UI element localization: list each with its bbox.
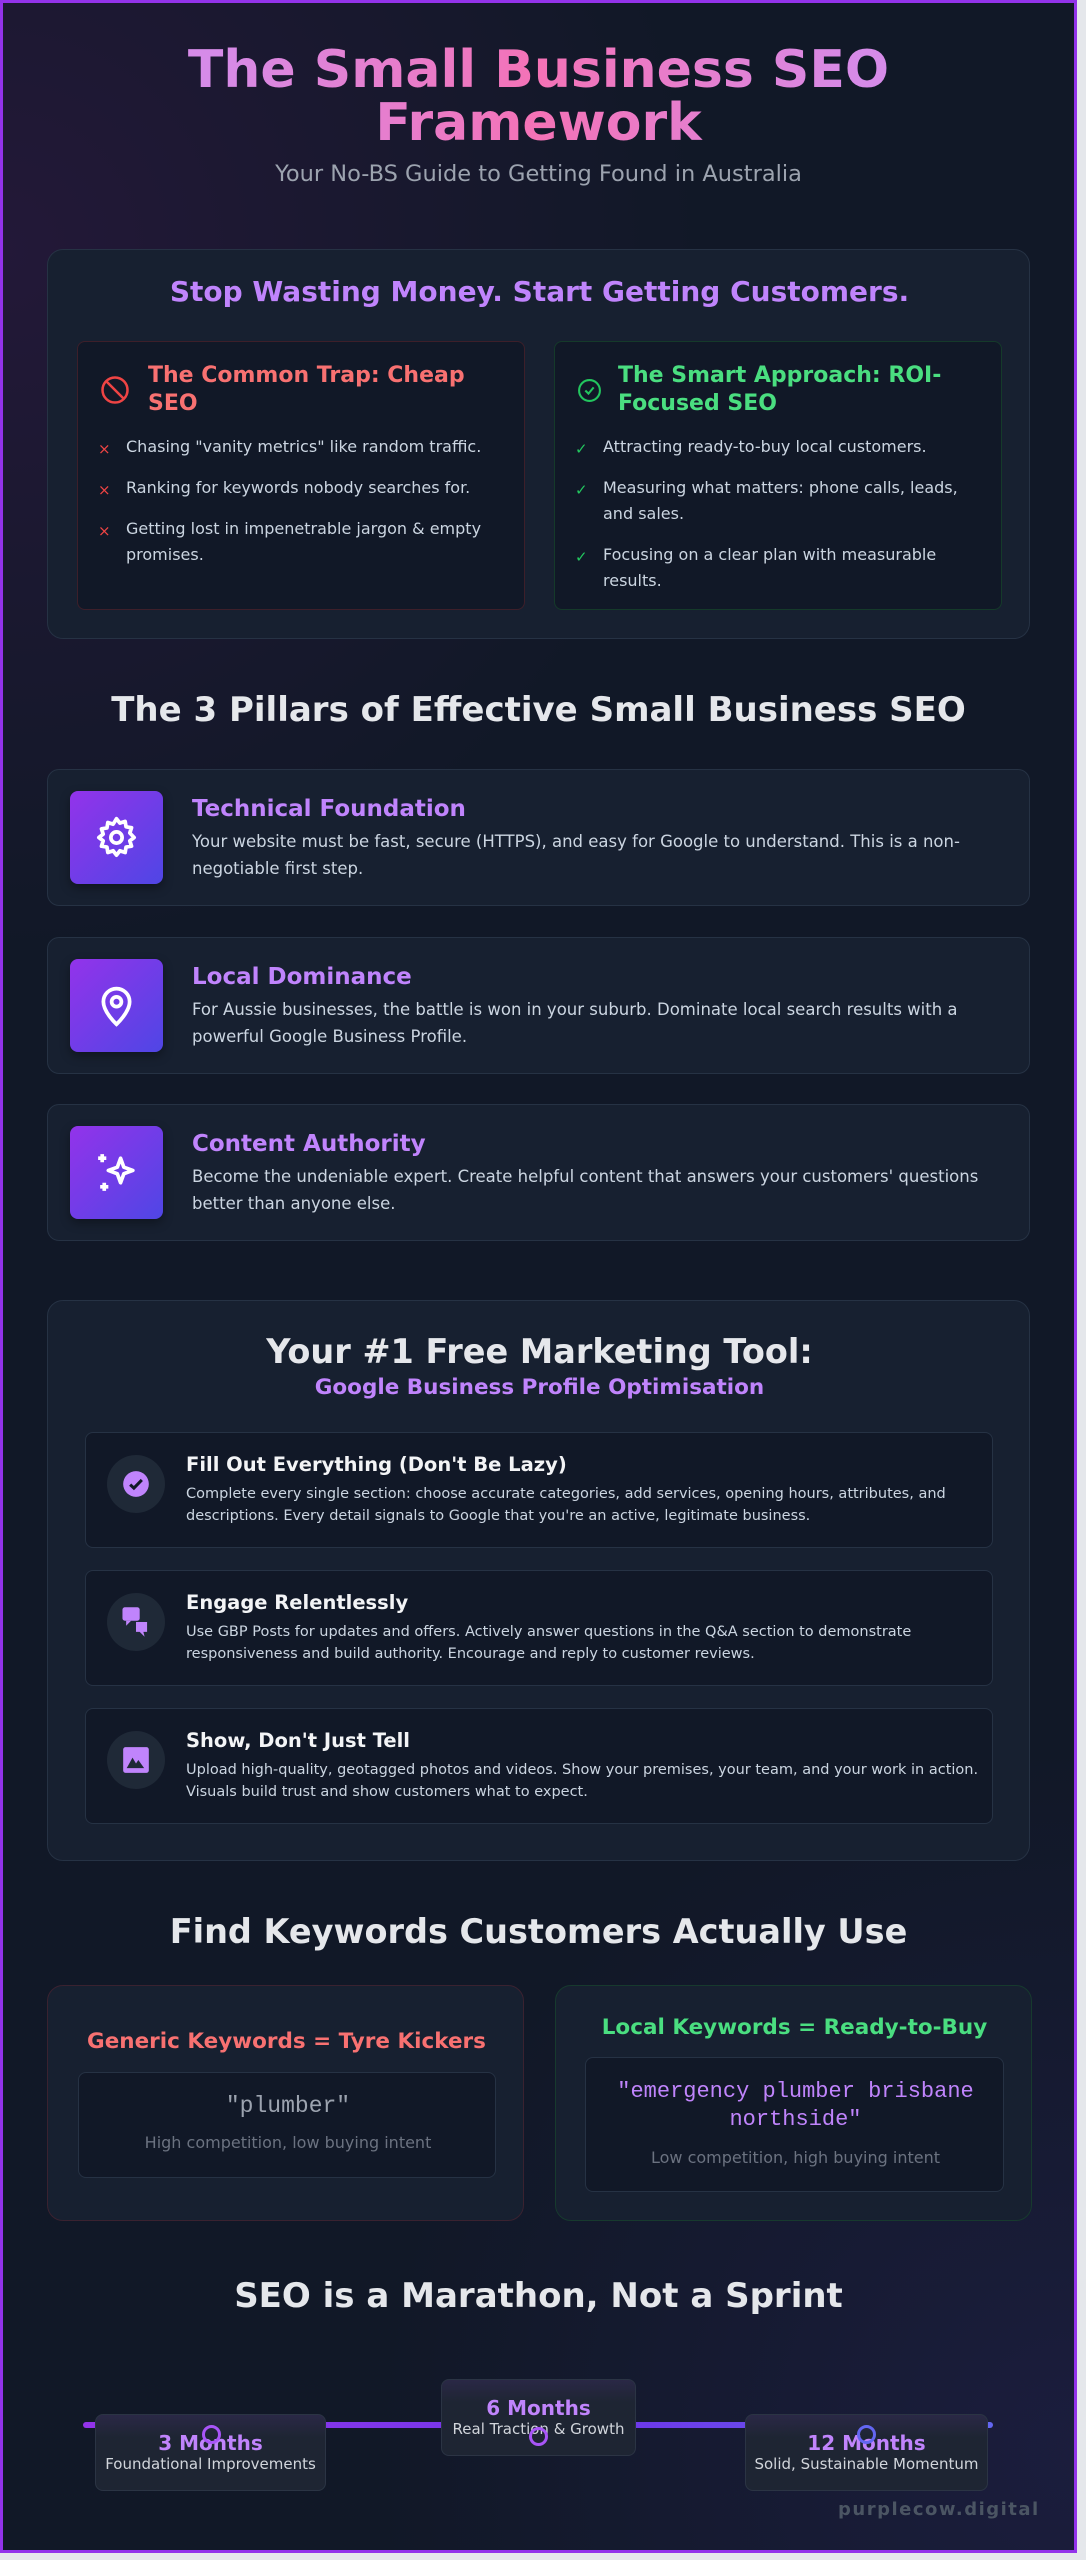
panel: comparison [47,249,1030,639]
title: Framework [375,93,702,153]
list: × [98,522,111,540]
footer brand: purplecow.digital [838,2499,1040,2520]
list: Getting lost in impenetrable jargon & empty promises. [126,519,481,564]
list: Ranking for keywords nobody searches for. [126,478,470,497]
list [575,437,958,590]
item: engage: Use GBP Posts for updates and offers. Actively answer questions in the Q&A section to demonstrate responsiveness and build authority. Encourage and reply to customer reviews. [186,1624,911,1662]
item: fill out: Fill Out Everything (Don't Be Lazy) [186,1453,567,1476]
keyword box: "emergency plumber brisbane northside" [617,2079,974,2132]
item: show [85,1708,993,1824]
item: engage: Engage Relentlessly [186,1591,408,1614]
icon: map pin [70,959,163,1052]
keyword box [78,2072,496,2178]
list: Measuring what matters: phone calls, leads, and sales. [603,478,958,523]
card heading: The Smart Approach: ROI-Focused SEO [618,363,941,416]
title: The Small Business SEO [188,40,889,100]
markers [202,2425,221,2444]
item: fill out: Complete every single section: choose accurate categories, add services, opening hours, attributes, and descriptions. Every detail signals to Google that you're an active, legitimate business. [186,1486,946,1524]
panel: generic keywords: Generic Keywords = Tyre Kickers [87,2029,486,2054]
list: Chasing "vanity metrics" like random traffic. [126,437,481,456]
list: ✓ [575,440,588,458]
pillar: content [47,1104,1030,1241]
pillar: local: For Aussie businesses, the battle is won in your suburb. Dominate local search results with a powerful Google Business Profile. [192,1000,958,1046]
milestone: 3 months: Foundational Improvements [105,2455,316,2473]
list: × [98,481,111,499]
pillar: content: Become the undeniable expert. Create helpful content that answers your customers' questions better than anyone else. [192,1167,978,1213]
icon: chat [107,1593,165,1651]
card: common trap [77,341,525,610]
list: ✓ [575,548,588,566]
panel: generic keywords [47,1985,524,2221]
pillar: content: Content Authority [192,1131,426,1157]
pillar: local [47,937,1030,1074]
keyword box: High competition, low buying intent [145,2133,431,2152]
heading: marathon: SEO is a Marathon, Not a Sprint [234,2276,843,2316]
milestone: 6 months: 6 Months [486,2396,591,2420]
icon: check [107,1455,165,1513]
heading: 3 pillars: The 3 Pillars of Effective Small Business SEO [111,690,966,730]
subheading: Google Business Profile Optimisation [315,1375,764,1400]
list: ✓ [575,481,588,499]
panel heading: Stop Wasting Money. Start Getting Customers. [170,275,909,308]
icon: image [107,1731,165,1789]
milestone: 12 months: 12 Months [807,2431,926,2455]
title [0,44,1077,150]
milestone: 12 months [745,2414,988,2491]
pillar: technical: Your website must be fast, secure (HTTPS), and easy for Google to understand. This is a non-negotiable first step. [192,832,960,878]
pillar: technical: Technical Foundation [192,796,466,822]
list: Attracting ready-to-buy local customers. [603,437,927,456]
item: fill out [85,1432,993,1548]
card heading: The Common Trap: Cheap SEO [148,363,465,416]
milestone: 6 months: Real Traction & Growth [453,2420,624,2438]
item: show: Show, Don't Just Tell [186,1729,410,1752]
icon: check circle [578,379,601,402]
timeline line [83,2422,993,2428]
heading: keywords: Find Keywords Customers Actually Use [170,1912,907,1951]
item: engage [85,1570,993,1686]
milestone: 3 months: 3 Months [158,2431,263,2455]
panel: local keywords: Local Keywords = Ready-to-Buy [602,2015,987,2040]
milestone: 6 months [441,2379,636,2456]
pillar: technical [47,769,1030,906]
item: show: Upload high-quality, geotagged photos and videos. Show your premises, your team, and your work in action. Visuals build trust and show customers what to expect. [186,1762,978,1800]
keyword box: "plumber" [226,2093,350,2119]
pillar: local: Local Dominance [192,964,412,990]
list: Focusing on a clear plan with measurable results. [603,545,936,590]
list [98,437,481,564]
subtitle: Your No-BS Guide to Getting Found in Australia [275,161,802,187]
icon: gear [70,791,163,884]
card: smart approach [554,341,1002,610]
icon: sparkles [70,1126,163,1219]
panel: GBP [47,1300,1030,1861]
panel: local keywords [555,1985,1032,2221]
list: × [98,440,111,458]
heading: Your #1 Free Marketing Tool: [266,1332,813,1371]
keyword box [585,2057,1004,2192]
milestone: 3 months [95,2414,326,2491]
milestone: 12 months: Solid, Sustainable Momentum [754,2455,979,2473]
keyword box: Low competition, high buying intent [651,2148,940,2167]
timeline [83,2379,993,2491]
icon: ban [101,376,129,404]
